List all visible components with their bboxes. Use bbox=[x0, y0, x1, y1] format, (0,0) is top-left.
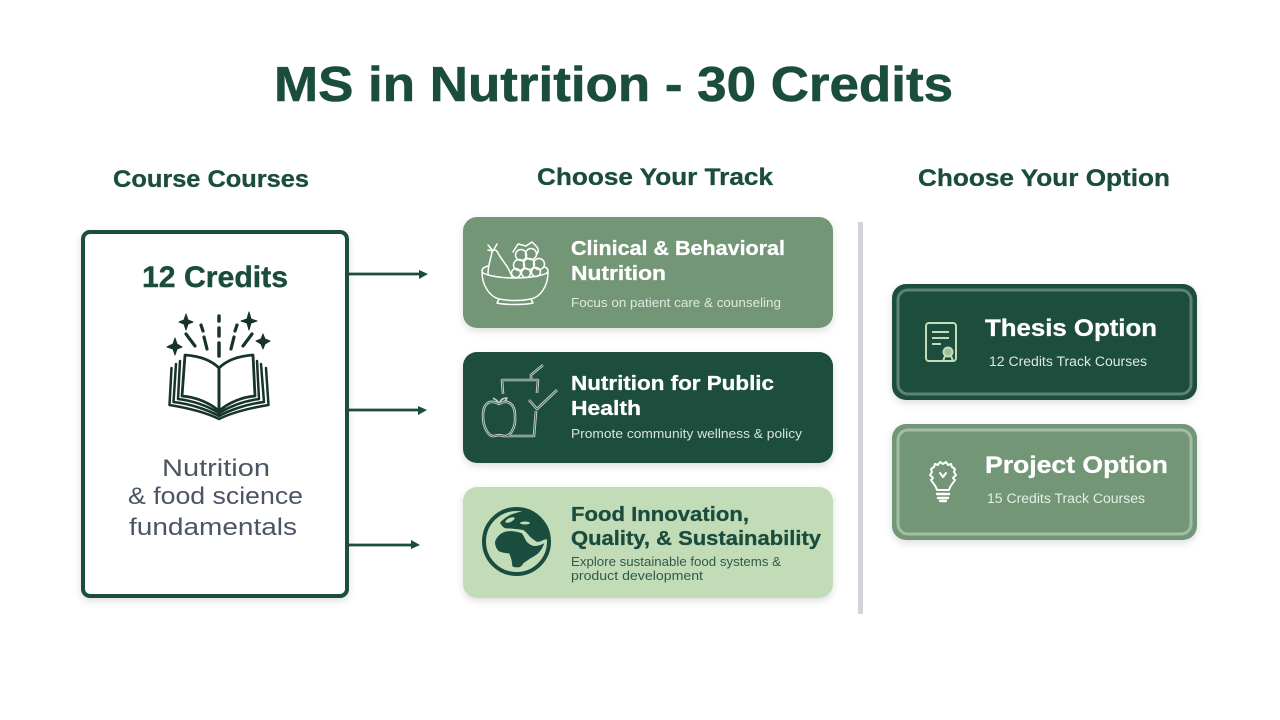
panel description: fundamentals bbox=[129, 514, 297, 541]
heading: choose your track: Choose Your Track bbox=[537, 164, 773, 191]
icon: drink, apple and check bbox=[483, 365, 557, 436]
track card: food innovation bbox=[463, 487, 833, 598]
option title: Thesis Option bbox=[985, 315, 1157, 342]
arrow: to clinical track bbox=[348, 270, 428, 279]
icon: light bulb bbox=[930, 462, 956, 501]
card description: Explore sustainable food systems & bbox=[571, 554, 781, 569]
card description: Focus on patient care & counseling bbox=[571, 295, 781, 310]
option card: project bbox=[892, 424, 1197, 540]
track card: clinical and behavioral nutrition bbox=[463, 217, 833, 328]
panel description: Nutrition bbox=[162, 455, 270, 482]
panel description: & food science bbox=[128, 483, 303, 510]
panel: core courses bbox=[83, 232, 347, 596]
icon: fruit bowl bbox=[482, 242, 548, 304]
arrow: to public health track bbox=[348, 406, 427, 415]
card title: Quality, & Sustainability bbox=[571, 527, 822, 550]
card title: Health bbox=[571, 397, 641, 420]
card description: product development bbox=[571, 568, 703, 583]
card description: Promote community wellness & policy bbox=[571, 426, 803, 441]
option description: 15 Credits Track Courses bbox=[987, 491, 1145, 506]
option card: thesis bbox=[892, 284, 1197, 400]
arrow: to food innovation track bbox=[348, 540, 420, 549]
card title: Clinical & Behavioral bbox=[571, 237, 785, 260]
panel description bbox=[128, 455, 303, 541]
option description: 12 Credits Track Courses bbox=[989, 354, 1147, 369]
icon: open book with sparkles bbox=[167, 312, 270, 419]
icon: globe bbox=[484, 509, 550, 574]
option title: Project Option bbox=[985, 452, 1168, 479]
title: MS in Nutrition - 30 Credits bbox=[274, 58, 953, 112]
card title: Nutrition bbox=[571, 262, 666, 285]
divider bbox=[858, 222, 863, 614]
panel heading: 12 credits: 12 Credits bbox=[142, 261, 288, 294]
card title: Food Innovation, bbox=[571, 503, 749, 526]
icon: certificate document bbox=[926, 323, 956, 361]
card title: Nutrition for Public bbox=[571, 372, 774, 395]
heading: course courses: Course Courses bbox=[113, 166, 309, 193]
track card: nutrition for public health bbox=[463, 352, 833, 463]
heading: choose your option: Choose Your Option bbox=[918, 165, 1170, 192]
